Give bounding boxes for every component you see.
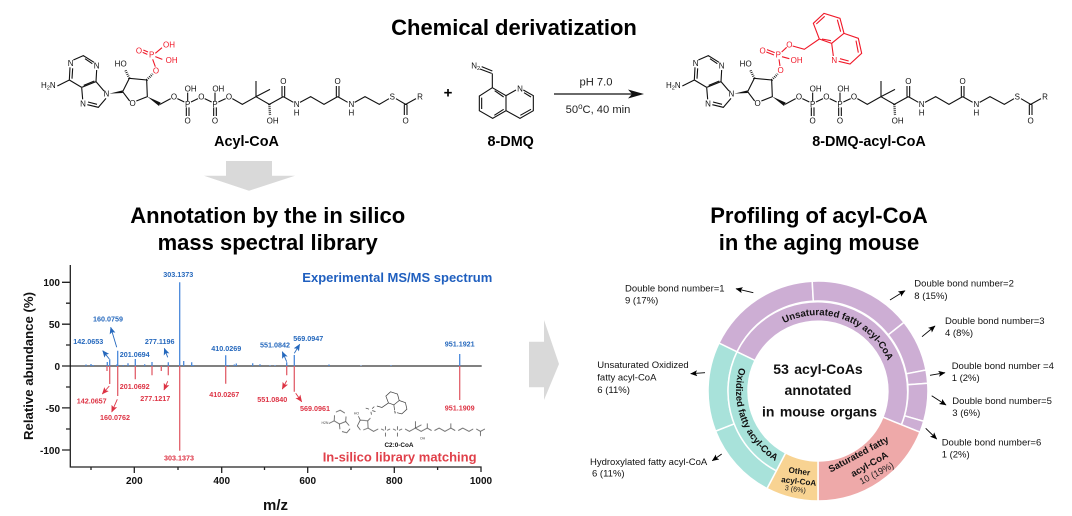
structure: acyl-CoA: P <box>185 100 190 109</box>
experimental peak labels: 303.1373 <box>163 270 193 279</box>
callout: unsaturated oxidized <box>597 360 689 396</box>
library peak labels: 569.0961 <box>300 404 330 413</box>
callout: hydroxylated: 6 (11%) <box>592 469 625 480</box>
axes <box>62 265 482 473</box>
structure: acyl-CoA: O <box>198 92 204 101</box>
experimental peak labels <box>73 270 475 359</box>
center label: in mouse organs <box>762 404 877 420</box>
callout: double bond 1: Double bond number=1 <box>625 284 725 294</box>
structure: 8-DMQ-acyl-CoA: O <box>960 77 966 86</box>
callout: double bond 3: 4 (8%) <box>945 328 973 339</box>
structure: 8-DMQ-acyl-CoA: OH <box>810 85 822 94</box>
label: Acyl-CoA: Acyl-CoA <box>214 134 279 150</box>
x axis labels: 200 <box>126 476 143 487</box>
callout: double bond 2: 8 (15%) <box>914 291 948 302</box>
callout: double bond 6: 1 (2%) <box>942 450 970 461</box>
reaction arrow with conditions: C, 40 min <box>583 104 630 116</box>
structure: acyl-CoA: N <box>80 99 86 108</box>
structure: 8-DMQ-acyl-CoA: O <box>905 77 911 86</box>
experimental peak labels: 951.1921 <box>445 340 475 348</box>
structure: 8-DMQ-acyl-CoA: HO <box>740 59 752 68</box>
label: 8-DMQ-acyl-CoA: 8-DMQ-acyl-CoA <box>812 134 926 150</box>
plus sign: + <box>444 84 453 102</box>
structure: acyl-CoA: N <box>94 61 100 70</box>
library peak labels: 142.0657 <box>77 396 107 406</box>
inset structure: C2:0-CoA: HO <box>354 412 359 416</box>
library peak labels: 303.1373 <box>164 454 194 462</box>
callout: unsaturated oxidized: fatty acyl-CoA <box>597 372 657 384</box>
structure: acyl-CoA: H <box>348 108 354 117</box>
library peak labels: 951.1909 <box>445 404 475 412</box>
heading: profiling: Profiling of acyl-CoA <box>710 203 928 228</box>
reaction arrow with conditions <box>554 76 644 116</box>
structure: 8-DMQ-acyl-CoA: O <box>851 92 857 101</box>
red 8-DMQ ester group <box>760 13 862 75</box>
library peak labels: 551.0840 <box>257 395 287 404</box>
ring label: unsaturated: Unsaturated fatty acyl-CoA <box>782 309 892 361</box>
red 8-DMQ ester group: O <box>778 66 784 75</box>
segment: saturated <box>818 417 920 501</box>
heading: annotation: mass spectral library <box>158 230 379 255</box>
red 8-DMQ ester group: P <box>776 51 781 60</box>
reaction arrow with conditions: 50 <box>566 104 578 116</box>
arrow: down to annotation <box>204 161 295 191</box>
heading: profiling: in the aging mouse <box>719 230 919 255</box>
structure: 8-DMQ-acyl-CoA: N <box>705 99 711 108</box>
outer ring: unsaturated <box>719 281 928 432</box>
callout arrows <box>691 289 946 461</box>
legend: library: In-silico library matching <box>323 450 477 464</box>
reaction arrow with conditions: pH 7.0 <box>580 76 612 88</box>
ring label: oxidized: Oxidized fatty acyl-CoA <box>736 368 777 461</box>
callout: hydroxylated <box>590 457 708 480</box>
structure: 8-DMQ-acyl-CoA: N <box>675 81 681 90</box>
library peak labels: 160.0762 <box>100 413 130 422</box>
inner ring: unsaturated <box>737 302 908 425</box>
structure: acyl-CoA: HO <box>115 59 127 68</box>
red 8-DMQ ester group: O <box>786 40 792 49</box>
structure: 8-DMQ-acyl-CoA: O <box>796 92 802 101</box>
chart: acyl-CoA donut <box>708 282 928 500</box>
chart: mirror MS/MS spectrum <box>21 265 493 514</box>
structure: acyl-CoA: O <box>130 99 136 108</box>
structure: acyl-CoA: O <box>403 116 409 125</box>
inset structure: C2:0-CoA <box>321 392 485 449</box>
structure: acyl-CoA: S <box>390 92 395 101</box>
callout: double bond 6 <box>942 438 1041 461</box>
experimental peak labels: 410.0269 <box>211 344 241 353</box>
structure: 8-DMQ-acyl-CoA: OH <box>837 85 850 94</box>
center label: annotated <box>785 382 851 398</box>
structure: 8-DMQ-acyl-CoA: S <box>1015 92 1020 101</box>
heading: annotation <box>130 203 405 255</box>
callout: unsaturated oxidized: 6 (11%) <box>597 385 630 396</box>
structure: acyl-CoA: N <box>294 100 300 109</box>
saturated label: 10 (19%) <box>858 460 895 487</box>
y axis labels: Relative abundance (%) <box>21 292 36 440</box>
structure: 8-DMQ-acyl-CoA: H <box>666 81 672 90</box>
experimental peak labels: 201.0694 <box>120 350 150 359</box>
experimental peak labels: 142.0653 <box>73 337 103 346</box>
structure: acyl-CoA: OH <box>267 116 279 125</box>
structure: 8-DMQ-acyl-CoA: O <box>1028 116 1034 125</box>
heading: profiling <box>710 203 928 255</box>
structure: acyl-CoA: OH <box>212 85 225 94</box>
callout: double bond 2 <box>914 279 1014 302</box>
callout: double bond 5: Double bond number=5 <box>952 396 1052 407</box>
structure: acyl-CoA: N <box>103 90 109 99</box>
red 8-DMQ ester group: O <box>760 47 766 56</box>
structure: acyl-CoA: O <box>212 116 218 125</box>
y axis labels: 0 <box>54 362 60 373</box>
structure: 8-DMQ-acyl-CoA: H <box>973 108 979 117</box>
red phosphate group <box>136 40 178 75</box>
label: 8-DMQ: 8-DMQ <box>488 134 534 150</box>
y axis labels: 100 <box>43 278 60 289</box>
experimental peak labels: 569.0947 <box>293 334 323 343</box>
callout: double bond 2: Double bond number=2 <box>914 279 1014 290</box>
structure: acyl-CoA: N <box>348 100 354 109</box>
callout: double bond 1 <box>625 284 725 306</box>
other label: 3 (6%) <box>784 483 806 495</box>
structure: acyl-CoA: O <box>226 92 232 101</box>
callout: double bond 4: 1 (2%) <box>952 373 980 384</box>
callout: double bond 5: 3 (6%) <box>952 408 980 419</box>
structure: 8-DMQ: 2 <box>477 66 480 72</box>
callout: double bond 4: Double bond number =4 <box>952 361 1054 372</box>
callout: hydroxylated: Hydroxylated fatty acyl-CoA <box>590 457 708 468</box>
x axis labels: 800 <box>386 476 403 487</box>
structure: 8-DMQ-acyl-CoA: R <box>1042 92 1048 101</box>
structure: acyl-CoA: O <box>280 77 286 86</box>
structure: 8-DMQ-acyl-CoA: O <box>823 92 829 101</box>
title: chemical derivatization: Chemical derivatization <box>391 15 637 40</box>
x axis labels: 400 <box>213 476 230 487</box>
structure: 8-DMQ-acyl-CoA: N <box>728 90 734 99</box>
red phosphate group: O <box>153 66 159 75</box>
other label <box>781 466 817 495</box>
callout: double bond 6: Double bond number=6 <box>942 438 1041 449</box>
structure: acyl-CoA: O <box>335 77 341 86</box>
structure: 8-DMQ: N <box>471 62 477 71</box>
experimental peak labels: 551.0842 <box>260 340 290 350</box>
outer ring: oxidized <box>708 343 776 488</box>
library peak labels: 201.0692 <box>120 382 150 391</box>
structure: 8-DMQ-acyl-CoA <box>666 13 1048 125</box>
callout: unsaturated oxidized: Unsaturated Oxidized <box>597 360 689 371</box>
red 8-DMQ ester group: N <box>831 56 837 65</box>
red 8-DMQ ester group: OH <box>791 56 803 65</box>
callout: double bond 3 <box>945 316 1045 339</box>
structure: acyl-CoA: O <box>171 92 177 101</box>
callout: double bond 4 <box>952 361 1054 384</box>
structure: 8-DMQ-acyl-CoA: OH <box>892 116 904 125</box>
callout: double bond 1: 9 (17%) <box>625 296 658 306</box>
structure: 8-DMQ-acyl-CoA: N <box>973 100 979 109</box>
experimental peak labels: 160.0759 <box>93 314 123 324</box>
y axis labels <box>21 278 60 457</box>
structure: 8-DMQ-acyl-CoA: O <box>810 116 816 125</box>
x axis labels: m/z <box>263 497 288 514</box>
y axis labels: -50 <box>46 404 60 415</box>
inset structure: C2:0-CoA: H2N <box>321 421 329 425</box>
other label: acyl-CoA <box>781 475 817 488</box>
structure: acyl-CoA <box>41 40 423 125</box>
reaction arrow with conditions: o <box>578 102 583 111</box>
structure: acyl-CoA: N <box>50 81 56 90</box>
structure: acyl-CoA: O <box>185 116 191 125</box>
structure: acyl-CoA: R <box>417 92 423 101</box>
inset structure: C2:0-CoA: OH <box>420 437 426 441</box>
experimental peaks <box>86 282 460 366</box>
structure: 8-DMQ-acyl-CoA: H <box>919 108 925 117</box>
inner ring: oxidized <box>728 352 786 471</box>
structure: 8-DMQ: N <box>517 84 523 93</box>
structure: 8-DMQ-acyl-CoA: P <box>837 100 843 109</box>
center label: 53 acyl-CoAs <box>773 361 863 377</box>
y axis labels: -100 <box>40 446 60 457</box>
x axis labels <box>126 476 493 514</box>
structure: acyl-CoA: OH <box>185 85 197 94</box>
other label: Other <box>788 466 812 478</box>
structure: 8-DMQ-acyl-CoA: 2 <box>672 85 675 91</box>
callout: double bond 5 <box>952 396 1052 419</box>
library peak labels <box>77 382 475 462</box>
structure: acyl-CoA: 2 <box>47 85 50 91</box>
arrow: right to profiling <box>529 320 559 400</box>
library peaks <box>107 366 460 451</box>
red phosphate group: O <box>136 47 142 56</box>
red phosphate group: OH <box>163 40 175 49</box>
structure: 8-DMQ <box>471 62 533 118</box>
structure: acyl-CoA: H <box>294 108 300 117</box>
library peak labels: 410.0267 <box>209 390 239 399</box>
inset structure: C2:0-CoA: N <box>394 410 397 414</box>
structure: 8-DMQ-acyl-CoA: N <box>719 61 725 70</box>
center label <box>762 361 877 420</box>
structure: 8-DMQ-acyl-CoA: N <box>693 59 699 68</box>
y axis labels: 50 <box>49 320 60 331</box>
structure: acyl-CoA: P <box>212 100 218 109</box>
library peak arrows <box>102 381 302 412</box>
segment: other <box>767 453 818 501</box>
structure: 8-DMQ-acyl-CoA: P <box>810 100 815 109</box>
heading: annotation: Annotation by the in silico <box>130 203 405 228</box>
structure: acyl-CoA: N <box>68 59 74 68</box>
structure: acyl-CoA: H <box>41 81 47 90</box>
structure: 8-DMQ-acyl-CoA: N <box>919 100 925 109</box>
saturated label: Saturated fatty <box>827 434 891 475</box>
experimental peak arrows <box>103 327 300 362</box>
legend: experimental: Experimental MS/MS spectrum <box>302 270 492 285</box>
saturated label: acyl-CoA <box>849 450 890 480</box>
structure: 8-DMQ-acyl-CoA: O <box>837 116 843 125</box>
x axis labels: 1000 <box>470 476 493 487</box>
library peak labels: 277.1217 <box>140 394 170 403</box>
experimental peak labels: 277.1196 <box>145 337 174 346</box>
x axis labels: 600 <box>299 476 316 487</box>
callout: double bond 3: Double bond number=3 <box>945 316 1045 327</box>
red phosphate group: OH <box>166 56 178 65</box>
red phosphate group: P <box>149 51 154 60</box>
structure: 8-DMQ-acyl-CoA: O <box>755 99 761 108</box>
inset structure: C2:0-CoA: C2:0-CoA <box>384 442 414 449</box>
